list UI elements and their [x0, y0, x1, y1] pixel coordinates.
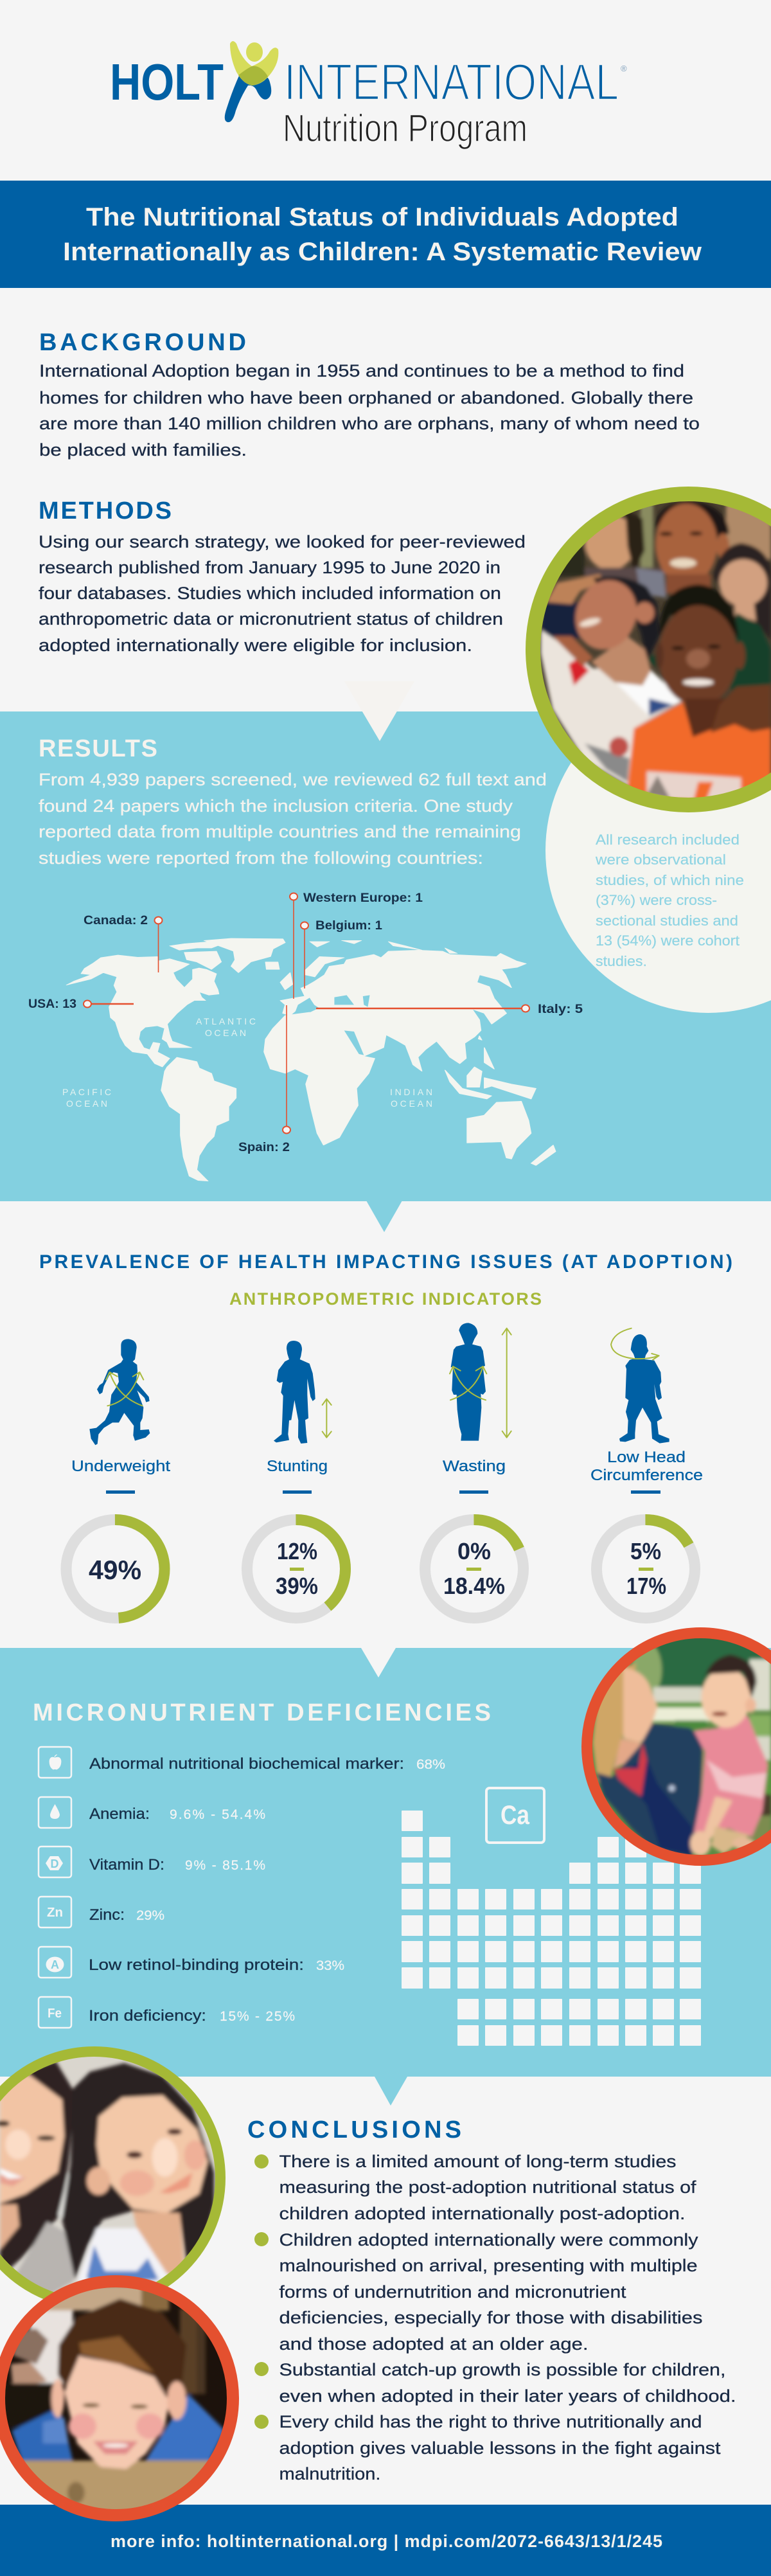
results paragraph: studies were reported from the following countries:: [39, 848, 483, 868]
row: zinc: Zinc:: [89, 1906, 125, 1924]
panel: observational studies callout: studies, of which nine: [596, 872, 744, 888]
panel: observational studies callout: were observational: [595, 852, 726, 868]
indicator: wasting: [425, 1458, 523, 1618]
row: iron deficiency: Fe: [48, 2007, 62, 2021]
row: vitamin D: 9% - 85.1%: [185, 1858, 265, 1873]
conclusion 1: [254, 2152, 696, 2223]
row: zinc: 29%: [136, 1908, 164, 1923]
periodic table graphic: [402, 1788, 701, 2046]
panel: observational studies callout: sectional studies and: [596, 913, 738, 929]
row: low retinol-binding protein: [39, 1947, 344, 1978]
panel: observational studies callout: All research included: [596, 832, 740, 848]
indicator: low head circumference: [590, 1449, 703, 1618]
pin: Italy: Italy: 5: [538, 1003, 583, 1016]
indicator: wasting: 18.4%: [443, 1573, 505, 1599]
ocean labels: INDIAN: [390, 1087, 432, 1097]
methods text: anthropometric data or micronutrient status of children: [39, 609, 503, 629]
conclusion 2: forms of undernutrition and micronutrient: [279, 2282, 626, 2302]
icon: wasting child: [450, 1323, 511, 1441]
heading: conclusions: CONCLUSIONS: [247, 2116, 461, 2143]
pin: Belgium: Belgium: 1: [315, 919, 382, 933]
row: abnormal nutritional biochemical marker: Abnormal nutritional biochemical marker:: [89, 1755, 404, 1773]
ocean labels: [62, 1016, 432, 1109]
row: iron deficiency: 15% - 25%: [220, 2009, 295, 2024]
indicator: stunting: 39%: [276, 1573, 318, 1599]
conclusion 2: and those adopted at an older age.: [279, 2334, 589, 2354]
indicator: underweight: [66, 1458, 170, 1618]
pin: Belgium: [301, 919, 382, 988]
inland seas: [334, 995, 370, 1055]
conclusion 3: [254, 2360, 736, 2406]
background text: homes for children who have been orphaned or abandoned. Globally there: [39, 388, 693, 407]
logo figure: [225, 41, 278, 122]
tile grid: [402, 1811, 701, 2046]
icon: low head circumference child: [611, 1328, 669, 1444]
results paragraph: [39, 770, 547, 868]
panel: observational studies callout: (37%) were cross-: [596, 892, 717, 908]
photo: smiling group of children: [520, 482, 771, 816]
row: abnormal nutritional biochemical marker: [39, 1747, 445, 1778]
row: iron deficiency: [39, 1997, 295, 2028]
heading: prevalence: PREVALENCE OF HEALTH IMPACTING ISSUES (AT ADOPTION): [39, 1251, 732, 1273]
arrow: section pointer into prevalence: [366, 1201, 402, 1232]
indicator: low head circumference: 5%: [630, 1538, 661, 1564]
indicator: underweight: 49%: [89, 1555, 141, 1585]
row: low retinol-binding protein: 33%: [316, 1958, 344, 1973]
panel: results background: [0, 711, 771, 1201]
footer banner: more info: holtinternational.org | mdpi.com/2072-6643/13/1/245: [111, 2532, 662, 2551]
logo subtitle: Nutrition Program: [283, 107, 527, 150]
indicator: low head circumference: 17%: [626, 1573, 666, 1599]
background text: be placed with families.: [39, 440, 247, 460]
panel: methods: [39, 497, 526, 655]
indicator: low head circumference: Circumference: [590, 1467, 703, 1484]
background text: are more than 140 million children who are orphans, many of whom need to: [39, 414, 700, 433]
row: abnormal nutritional biochemical marker: 68%: [416, 1757, 445, 1772]
panel: results text: [39, 735, 547, 868]
indicator: wasting: 0%: [457, 1538, 491, 1564]
row: anemia: Anemia:: [89, 1805, 150, 1823]
conclusion 4: adoption gives valuable lessons in the fight against: [279, 2438, 721, 2458]
row: zinc: Zn: [47, 1906, 63, 1920]
conclusion 4: [254, 2412, 721, 2483]
conclusion 1: There is a limited amount of long-term studies: [279, 2152, 676, 2171]
indicator: stunting: 12%: [277, 1538, 317, 1564]
row: iron deficiency: Iron deficiency:: [89, 2007, 206, 2025]
heading: background: BACKGROUND: [39, 329, 246, 356]
panel: background: [39, 329, 700, 460]
conclusion 2: malnourished on arrival, presenting with multiple: [279, 2256, 698, 2275]
ocean labels: PACIFIC: [62, 1087, 111, 1097]
pin: Canada: [84, 914, 162, 972]
indicator: low head circumference: Low Head: [607, 1449, 686, 1466]
results paragraph: From 4,939 papers screened, we reviewed 62 full text and: [39, 770, 547, 789]
conclusion 4: Every child has the right to thrive nutritionally and: [279, 2412, 702, 2431]
methods text: Using our search strategy, we looked for peer-reviewed: [39, 532, 526, 551]
heading: methods: METHODS: [39, 497, 172, 524]
row: anemia: 9.6% - 54.4%: [170, 1807, 265, 1822]
row: anemia: [39, 1797, 265, 1828]
icon: underweight running child: [89, 1339, 150, 1445]
methods text: research published from January 1995 to June 2020 in: [39, 558, 501, 577]
row: zinc: [39, 1897, 164, 1928]
photo: smiling boy leaning on wood: [0, 2272, 244, 2526]
panel: observational studies callout: 13 (54%) were cohort: [596, 933, 740, 949]
conclusion 1: children adopted internationally post-adoption.: [279, 2204, 685, 2223]
pin: Canada: Canada: 2: [84, 914, 148, 927]
heading: micronutrient deficiencies: MICRONUTRIENT DEFICIENCIES: [33, 1699, 491, 1726]
conclusion 2: [254, 2230, 703, 2354]
arrow: section pointer into conclusions: [375, 2077, 407, 2106]
pin: Spain: Spain: 2: [238, 1141, 290, 1154]
arrow: section pointer into results: [344, 681, 414, 741]
conclusion 3: even when adopted in their later years of childhood.: [279, 2386, 736, 2406]
photo: two smiling girls: [0, 2046, 226, 2299]
ocean labels: OCEAN: [205, 1028, 246, 1038]
background text: International Adoption began in 1955 and continues to be a method to find: [39, 361, 684, 380]
methods text: [39, 532, 526, 655]
indicator: stunting: [247, 1458, 346, 1618]
indicator: stunting: Stunting: [267, 1458, 328, 1475]
photo: mother holding smiling child: [578, 1623, 771, 1870]
conclusion 1: measuring the post-adoption nutritional status of: [279, 2178, 696, 2197]
ocean labels: ATLANTIC: [196, 1016, 256, 1026]
row: low retinol-binding protein: A: [51, 1958, 59, 1971]
title banner: The Nutritional Status of Individuals Adopted: [86, 203, 678, 231]
heading: results: RESULTS: [39, 735, 157, 762]
methods text: adopted internationally were eligible for inclusion.: [39, 636, 472, 655]
continents: [66, 938, 556, 1181]
element tile: Ca: [486, 1788, 544, 1843]
panel: micronutrient deficiencies background: [0, 1648, 771, 2077]
pin: USA: [28, 997, 134, 1011]
ocean labels: OCEAN: [66, 1098, 107, 1109]
row: vitamin D: [39, 1847, 265, 1877]
panel: conclusions: [247, 2116, 736, 2483]
conclusion 2: Children adopted internationally were commonly: [279, 2230, 698, 2250]
logo wordmark INTERNATIONAL: INTERNATIONAL: [284, 53, 619, 111]
icon: stunting child: [274, 1341, 332, 1444]
pin: Western Europe: Western Europe: 1: [303, 891, 423, 905]
indicator: underweight: Underweight: [71, 1458, 170, 1475]
element tile: Ca: Ca: [501, 1800, 530, 1830]
ocean labels: OCEAN: [391, 1098, 432, 1109]
arrow: section pointer into micronutrients: [361, 1648, 396, 1677]
methods text: four databases. Studies which included information on: [39, 584, 501, 603]
pin: USA: USA: 13: [28, 997, 76, 1011]
logo wordmark HOLT: HOLT: [110, 53, 224, 111]
row: vitamin D: D: [50, 1857, 59, 1870]
panel: observational studies callout: [545, 688, 771, 1013]
results paragraph: reported data from multiple countries and the remaining: [39, 822, 521, 841]
title banner: Internationally as Children: A Systematic Review: [63, 238, 702, 266]
title banner: [0, 181, 771, 288]
results paragraph: found 24 papers which the inclusion criteria. One study: [39, 796, 513, 816]
conclusion 3: Substantial catch-up growth is possible for children,: [279, 2360, 726, 2379]
conclusion 4: malnutrition.: [279, 2464, 380, 2483]
subheading: anthropometric indicators: ANTHROPOMETRIC INDICATORS: [229, 1289, 542, 1309]
pin: Spain: [238, 1005, 290, 1154]
row: vitamin D: Vitamin D:: [89, 1856, 164, 1874]
background text: [39, 361, 700, 460]
registered mark: ®: [621, 64, 627, 73]
indicator: wasting: Wasting: [443, 1458, 506, 1475]
pin: Italy: [316, 1003, 583, 1016]
footer banner: [0, 2505, 771, 2576]
panel: observational studies callout: studies.: [596, 953, 647, 969]
pin: Western Europe: [290, 891, 423, 999]
conclusion 2: deficiencies, especially for those with disabilities: [279, 2308, 703, 2327]
logo: Holt International Nutrition Program: [110, 41, 627, 150]
row: low retinol-binding protein: Low retinol-binding protein:: [89, 1956, 304, 1974]
world map: [28, 891, 583, 1181]
